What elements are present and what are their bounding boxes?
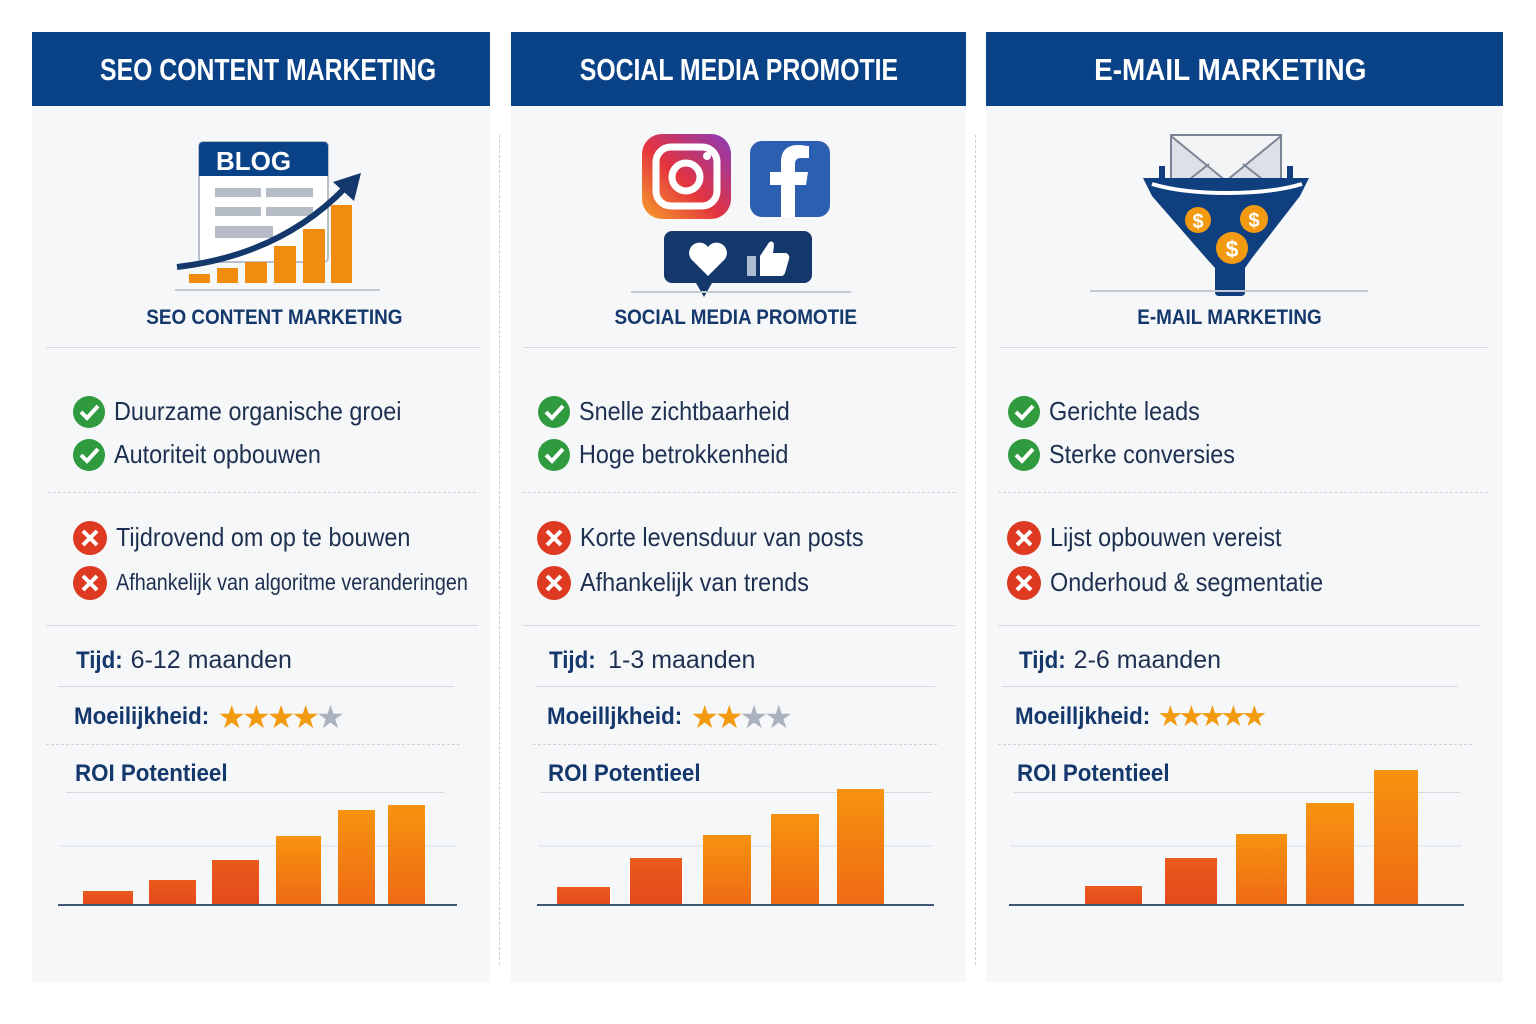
icon: email funnel: [1090, 134, 1368, 296]
ROI: email: ROI Potentieel: [1017, 760, 1170, 787]
cons: SEO: [73, 521, 468, 600]
cons: email: Onderhoud & segmentatie: [1050, 567, 1323, 597]
time: email: 2-6 maanden: [1074, 646, 1221, 674]
difficulty: social: ★★★★: [690, 699, 789, 735]
header: social: SOCIAL MEDIA PROMOTIE: [579, 52, 898, 87]
time: SEO: 6-12 maanden: [131, 646, 292, 674]
ROI: social: ROI Potentieel: [548, 760, 701, 787]
difficulty: email: ★★★★★: [1157, 701, 1262, 733]
pros: social: Snelle zichtbaarheid: [579, 396, 790, 426]
header: social: [511, 32, 966, 106]
pros: SEO: Duurzame organische groei: [114, 396, 401, 426]
pros: social: Hoge betrokkenheid: [579, 439, 788, 469]
difficulty: SEO: [74, 699, 342, 735]
cons: SEO: Afhankelijk van algoritme veranderingen: [116, 569, 468, 595]
pros: social: [538, 396, 790, 471]
label: SEO: SEO CONTENT MARKETING: [146, 306, 403, 329]
icon: instagram facebook likes: [631, 134, 851, 297]
pros: email: Sterke conversies: [1049, 439, 1235, 469]
label: email: E-MAIL MARKETING: [1137, 306, 1321, 329]
header: SEO: [32, 32, 490, 106]
time: SEO: Tijd:: [76, 647, 123, 674]
bar chart: email ROI: [1009, 770, 1464, 906]
cons: social: [537, 521, 864, 600]
difficulty: social: Moeilljkheid:: [547, 703, 682, 730]
panel: SEO content marketing: [32, 32, 490, 982]
cons: social: Korte levensduur van posts: [580, 522, 864, 552]
pros: SEO: [73, 396, 401, 471]
pros: email: Gerichte leads: [1049, 396, 1200, 426]
label: social: SOCIAL MEDIA PROMOTIE: [614, 306, 857, 329]
bar chart: SEO ROI: [58, 805, 457, 906]
pros: email: [1008, 396, 1235, 471]
difficulty: social: [547, 699, 791, 735]
header: email: [986, 32, 1503, 106]
panel: social media promotie: [511, 32, 966, 982]
time: social: 1-3 maanden: [608, 646, 755, 674]
difficulty: SEO: Moeilijkheid:: [74, 703, 209, 730]
ROI: SEO: ROI Potentieel: [75, 760, 228, 787]
cons: email: Lijst opbouwen vereist: [1050, 522, 1282, 552]
panel: e-mail marketing: [986, 32, 1503, 982]
cons: SEO: Tijdrovend om op te bouwen: [116, 522, 410, 552]
icon: blog growth chart: BLOG: [216, 146, 291, 176]
difficulty: email: [1015, 701, 1266, 733]
icon: email funnel: $: [1226, 236, 1239, 262]
cons: social: Afhankelijk van trends: [580, 567, 809, 597]
icon: email funnel: $: [1248, 210, 1260, 232]
time: social: Tijd:: [549, 647, 596, 674]
header: email: E-MAIL MARKETING: [1094, 52, 1367, 87]
icon: blog growth chart: [175, 141, 380, 291]
difficulty: email: Moeilljkheid:: [1015, 703, 1150, 730]
header: SEO: SEO CONTENT MARKETING: [100, 52, 436, 87]
pros: SEO: Autoriteit opbouwen: [114, 439, 321, 469]
difficulty: SEO: ★★★★★: [217, 699, 341, 735]
bar chart: social ROI: [537, 789, 934, 906]
cons: email: [1007, 521, 1323, 600]
time: email: Tijd:: [1019, 647, 1066, 674]
icon: email funnel: $: [1192, 211, 1204, 233]
